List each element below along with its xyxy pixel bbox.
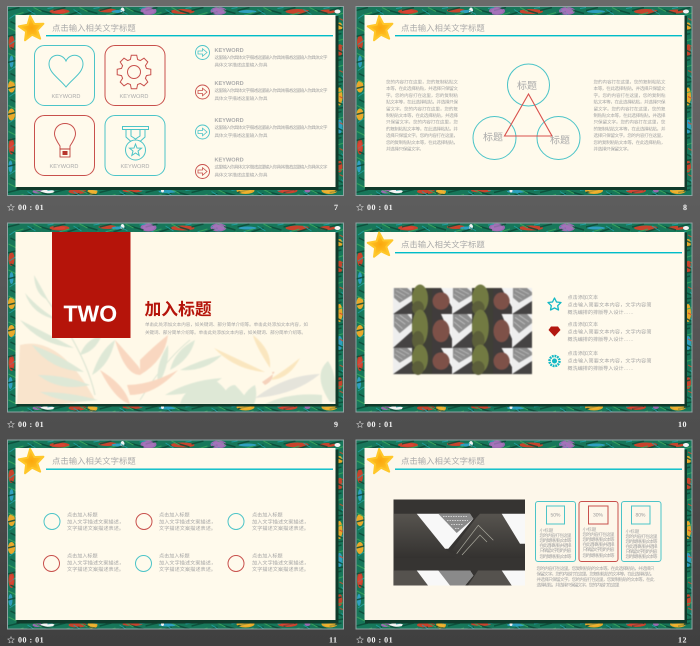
title underline (395, 35, 682, 36)
venn diagram: 标题 (517, 80, 537, 92)
point 5: 点击加入标题 (159, 552, 190, 560)
card: 50%: 在此选择粘贴并选择 (540, 543, 572, 548)
right text block: 您的复制粘贴文本等，在此选择粘贴， (594, 140, 666, 145)
venn diagram (473, 64, 580, 160)
cream content card (16, 232, 336, 404)
right text block: 并选择只保留文字。 (594, 146, 632, 152)
point 2: 文字描述文案描述表述。 (159, 525, 216, 532)
card: 50%: 小标题 (540, 528, 554, 533)
left text block: 字。您的内容打在这里，您的复制粘 (386, 93, 458, 98)
section title: 加入标题 (144, 300, 212, 319)
keyword item 1: 具体文字描述这里输入你具 (214, 62, 268, 68)
keyword item 4: KEYWORD (214, 158, 244, 164)
keyword item 3 (196, 118, 328, 139)
keyword item 3: 这里输入你具体文字描述这里输入你具体描述这里输入你具体文字 (214, 125, 328, 130)
point 4: 点击加入标题 (67, 552, 98, 560)
footer: slide 7 (8, 203, 338, 212)
card: 80%: 在此选择粘贴并选择 (626, 544, 658, 549)
heading: 点击输入相关文字标题 (401, 240, 485, 250)
card: 80%: 80% (635, 512, 646, 518)
list item 1 (568, 294, 652, 316)
venn diagram: 标题 (550, 134, 570, 146)
right text block: 本等，在此选择粘贴，并选择只保留文 (594, 86, 666, 91)
point 4 (44, 552, 124, 573)
point 3: 文字描述文案描述表述。 (252, 525, 309, 532)
section description: 单击此处添加文本内容，如关键词、部分简单介绍等。单击此处添加文本内容，如 (145, 322, 308, 327)
keyword item 1: 这里输入你具体文字描述这里输入你具体描述这里输入你具体文字 (214, 55, 328, 60)
left text block: 留文字。您的内容打在这里，您的复 (386, 106, 458, 111)
venn diagram: 标题 (483, 132, 503, 144)
photo collage (393, 285, 532, 375)
keyword item 4: 具体文字描述这里输入你具 (214, 172, 268, 178)
card: 30%: 在此选择粘贴并选择 (582, 542, 615, 547)
right text block: 只保留文字。您的内容打在这里，您 (594, 120, 666, 125)
floral border (356, 440, 692, 629)
title underline (46, 468, 333, 470)
icon: teal flower (550, 356, 560, 366)
point 3: 点击加入标题 (252, 512, 283, 518)
floral border (8, 6, 344, 196)
icon card: gear: KEYWORD (120, 94, 148, 100)
point 6: 文字描述文案描述表述。 (252, 566, 309, 573)
point 2: 加入文字描述文案描述， (159, 518, 216, 526)
left text block: 的复制粘贴文本等，在此选择粘贴，并 (386, 126, 458, 131)
list item 1: 点击添加文本 (568, 294, 598, 301)
summary paragraph: 您的内容打在这里，您复制粘贴的文本等，在此选择粘贴，并选择只 (536, 566, 655, 571)
left text block: 制粘贴文本等，在此选择粘贴，并选择 (386, 113, 458, 118)
point 5: 文字描述文案描述表述。 (159, 566, 216, 573)
right text block (594, 80, 666, 152)
title underline (395, 252, 682, 253)
card: 30%: 30% (593, 512, 604, 518)
list item 2: 点击输入简要文本内容，文字内容简 (568, 328, 652, 336)
keyword item 2: 这里输入你具体文字描述这里输入你具体描述这里输入你具体文字 (214, 88, 328, 93)
footer: slide 10: 00 : 01 (367, 420, 393, 429)
footer: slide 9 (8, 420, 338, 429)
point 5 (136, 552, 216, 573)
heading: 点击输入相关文字标题 (401, 23, 485, 33)
cream content card (364, 15, 684, 187)
footer: slide 12 (357, 636, 687, 644)
card: 30%: 小标题 (582, 527, 597, 532)
left text block: 并选择只保留文字。 (386, 146, 424, 152)
left text block: 选择只保留文字。您的内容打在这里， (386, 133, 458, 138)
icon card: light bulb (34, 116, 94, 176)
footer: slide 9: 9 (334, 420, 338, 429)
heading: 点击输入相关文字标题 (401, 456, 485, 466)
card: 50%: 您的复制粘贴文本等 (540, 554, 572, 559)
section description: 关键词、部分简单介绍等。单击此处添加文本内容，如关键词、部分简单介绍等。 (145, 330, 306, 335)
footer: slide 8 (357, 203, 688, 212)
left text block: 贴文本等，在此选择粘贴，并选择只保 (386, 100, 458, 105)
title underline (395, 468, 682, 470)
card: 80% (622, 502, 661, 562)
footer: slide 8: 00 : 01 (367, 203, 393, 212)
panel: slide 11 six points (8, 440, 344, 629)
section description (145, 322, 308, 335)
laptop photo (394, 500, 525, 586)
keyword item 1 (196, 46, 328, 68)
keyword item 1: KEYWORD (214, 48, 244, 54)
red section block (52, 232, 130, 338)
panel: slide 8 venn (356, 6, 692, 196)
icon: star (367, 15, 394, 41)
point 1 (44, 512, 124, 532)
point 1: 文字描述文案描述表述。 (67, 525, 124, 532)
icon card: heart: KEYWORD (52, 94, 80, 100)
icon: teal star (548, 298, 561, 310)
panel: slide 9 section cover (8, 223, 344, 412)
floral border (356, 223, 692, 412)
icon card: light bulb: KEYWORD (50, 164, 78, 170)
right text block: 字。您的内容打在这里，您的复制粘 (594, 93, 666, 98)
keyword item 2 (196, 81, 328, 101)
heading: 点击输入相关文字标题 (52, 23, 136, 33)
summary paragraph: 选择粘贴，并选择只保留文字。您的内容打在这里 (536, 582, 620, 588)
panel: slide 10 photo list (356, 223, 692, 412)
right text block: 您的内容打在这里，您的复制粘贴文 (594, 80, 666, 84)
cream content card (16, 15, 336, 187)
card: 50%: 您的复制粘贴文本等 (540, 538, 572, 543)
cream content card (364, 448, 684, 620)
footer: slide 11: 00 : 01 (18, 636, 44, 644)
footer: slide 10: 10 (678, 420, 687, 429)
summary paragraph (536, 566, 655, 588)
floral border (356, 6, 692, 196)
card: 80%: 只保留文字您的内容 (626, 549, 658, 554)
panel: slide 7 keywords (8, 6, 344, 196)
floral border (8, 223, 344, 412)
point 6: 加入文字描述文案描述， (252, 560, 309, 566)
card: 80%: 您的复制粘贴文本等 (626, 554, 658, 559)
point 6: 点击加入标题 (252, 552, 283, 560)
list item 2: 点击添加文本 (568, 321, 598, 328)
title underline (46, 35, 333, 36)
point 5: 加入文字描述文案描述， (159, 560, 216, 566)
card: 80%: 您的复制粘贴文本等 (626, 539, 658, 544)
card: 50%: 只保留文字您的内容 (540, 548, 572, 553)
card: 80%: 小标题 (626, 529, 640, 534)
heading: 点击输入相关文字标题 (52, 456, 136, 466)
list item 3: 概洗编排的排版导入设计…… (568, 365, 634, 372)
point 4: 文字描述文案描述表述。 (67, 566, 124, 573)
right text block: 制粘贴文本等，在此选择粘贴，并选择 (594, 113, 666, 118)
keyword item 4 (196, 158, 328, 178)
point 1: 点击加入标题 (67, 512, 98, 518)
left text block (386, 80, 458, 152)
card: 30%: 只保留文字您的内容 (582, 547, 615, 552)
footer: slide 8: 8 (683, 203, 688, 212)
summary paragraph: 保留文字。您的内容打在这里，您复制粘贴的文本等，在此选择粘贴， (536, 572, 654, 576)
right text block: 选择只保留文字。您的内容打在这里， (594, 133, 666, 138)
icon: red gem (548, 326, 560, 336)
section number: TWO (64, 300, 117, 326)
footer: slide 11 (8, 636, 338, 644)
icon card: medal (105, 116, 165, 176)
icon: star (367, 231, 394, 257)
card: 30%: 您的内容打在这里 (582, 532, 615, 537)
cream content card (364, 232, 684, 404)
list item 3: 点击添加文本 (568, 350, 598, 357)
list item 2 (568, 321, 652, 343)
icon: star (18, 15, 45, 41)
point 3: 加入文字描述文案描述， (252, 518, 309, 526)
keyword item 3: 具体文字描述这里输入你具 (214, 133, 268, 138)
left text block: 您的复制粘贴文本等，在此选择粘贴， (386, 140, 458, 145)
footer: slide 9: 00 : 01 (18, 420, 44, 429)
keyword item 2: KEYWORD (214, 81, 244, 87)
point 2 (136, 512, 216, 532)
point 3 (228, 512, 309, 532)
card: 80%: 您的内容打在这里 (626, 534, 658, 539)
right text block: 的复制粘贴文本等，在此选择粘贴，并 (594, 126, 666, 131)
left text block: 您的内容打在这里，您的复制粘贴文 (386, 80, 458, 84)
faded tropical leaves (17, 275, 336, 406)
card: 50%: 50% (550, 512, 561, 518)
right text block: 留文字。您的内容打在这里，您的复 (594, 106, 666, 111)
footer: slide 7: 00 : 01 (18, 203, 44, 212)
footer: slide 10 (357, 420, 687, 429)
point 1: 加入文字描述文案描述， (67, 518, 124, 526)
icon card: heart (34, 46, 94, 106)
icon card: gear (105, 46, 165, 106)
point 6 (228, 552, 309, 573)
icon: star (367, 448, 394, 474)
footer: slide 12: 12 (678, 636, 687, 644)
keyword item 3: KEYWORD (214, 118, 244, 124)
card: 50%: 您的内容打在这里 (540, 533, 572, 538)
point 2: 点击加入标题 (159, 512, 190, 518)
left text block: 本等，在此选择粘贴，并选择只保留文 (386, 86, 458, 91)
list item 1: 概洗编排的排版导入设计…… (568, 309, 634, 316)
card: 30% (579, 502, 618, 562)
left text block: 只保留文字。您的内容打在这里，您 (386, 120, 458, 125)
card: 30%: 您的复制粘贴文本等 (582, 553, 615, 558)
card: 30%: 您的复制粘贴文本等 (582, 537, 615, 542)
list item 1: 点击输入简要文本内容，文字内容简 (568, 302, 652, 308)
icon card: medal: KEYWORD (121, 164, 149, 170)
panel: slide 12 percentages (356, 440, 692, 629)
summary paragraph: 并选择只保留文字。您的内容打在这里，您复制粘贴的文本等，在此 (536, 577, 655, 582)
floral border (8, 440, 344, 629)
right text block: 贴文本等，在此选择粘贴，并选择只保 (594, 100, 666, 105)
footer: slide 11: 11 (329, 636, 338, 644)
keyword item 2: 具体文字描述这里输入你具 (214, 96, 268, 101)
cream content card (16, 448, 336, 620)
icon: star (18, 448, 45, 474)
keyword item 4: 这里输入你具体文字描述这里输入你具体描述这里输入你具体文字 (214, 164, 328, 170)
list item 3 (568, 350, 652, 372)
list item 2: 概洗编排的排版导入设计…… (568, 336, 634, 343)
footer: slide 7: 7 (334, 203, 338, 212)
card: 50% (536, 502, 576, 562)
list item 3: 点击输入简要文本内容，文字内容简 (568, 358, 652, 364)
footer: slide 12: 00 : 01 (367, 636, 393, 644)
point 4: 加入文字描述文案描述， (67, 560, 124, 566)
